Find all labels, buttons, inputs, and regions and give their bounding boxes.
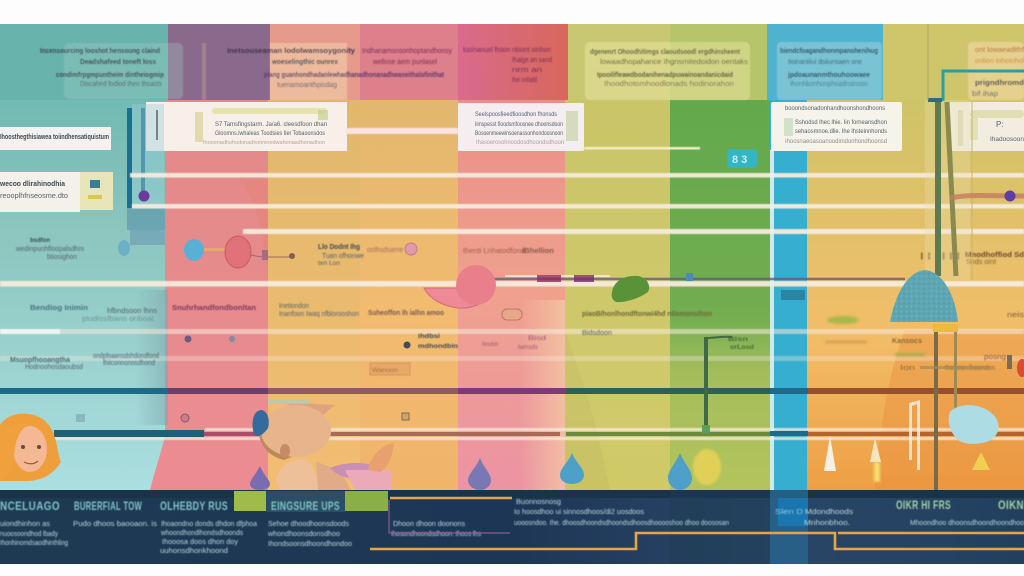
top text block: right column: [968, 42, 1024, 100]
label row: lower text left: Wanoon: [372, 368, 398, 374]
label row: lower text left: Msuopfhooangtha: [10, 357, 70, 364]
teal icon chip: [727, 149, 757, 168]
callout: white card 4: Ihadoosoon: [990, 137, 1024, 143]
callout: white card 2: Seelspoosfieedfioosdhon fhonsds: [475, 112, 557, 118]
label row: lower text left: Ion: [900, 365, 915, 372]
icon: blue square marker: [781, 290, 805, 300]
callout: white card 3: Sshodsd lhec lhie. Iin forneansdhon: [795, 120, 887, 126]
label row: lower text left: neis: [1007, 312, 1024, 319]
timeline second bar: [54, 430, 1024, 437]
footer text columns: whondhoonsdonsdhoo: [267, 531, 340, 538]
top text block: pink columns: Ihaige an sand: [512, 57, 552, 64]
footer text columns: [0, 499, 1024, 555]
footer text columns: whoondhondlhondsdhoonds: [160, 530, 243, 537]
callout: white card 3: [771, 102, 902, 151]
callout: white card 3: booondsonadonhandhoonshondhoons: [785, 106, 885, 112]
icon: green leaf: [612, 276, 649, 302]
icon: blue textured dome: [890, 270, 958, 322]
label row: mid text: Tuan ofhonwe: [322, 253, 364, 260]
top text block: blue column: [777, 42, 882, 100]
callout: white card 4: P:: [996, 120, 1004, 129]
icon: red droplet edge: [1017, 359, 1024, 377]
callout: left white bars: reooplhfnseosme.dto: [0, 193, 68, 200]
icon: small timeline dots: [76, 336, 410, 422]
icon: white cone markers: [824, 400, 990, 482]
label row: lower text left: ondpfoaansdshdondfond: [93, 353, 159, 360]
footer text columns: Ihoaondno donds dhdon dfphoa: [161, 521, 257, 528]
label row: mid text: Llo Dodnt Ihg: [318, 244, 360, 251]
label row: lower text left: ihdbsi: [418, 334, 440, 340]
footer text columns: Slen D: [775, 509, 803, 516]
icon: water drops: [250, 453, 692, 490]
top text block: blue column: biendcfoagandhonmpanohenihug: [780, 48, 878, 55]
callout: white card 4: [948, 102, 1024, 151]
footer text columns: nuoosoondhod lbady: [0, 531, 58, 538]
footer heading row: OLHEBDY RUS: [160, 499, 228, 513]
label row: lower text left: orLosd: [730, 345, 754, 351]
top text block: olive columns: Ipooilifleawdbodanihenadpuwainoandanicdaid: [597, 72, 733, 79]
label row: lower text left: Inetiondon: [279, 303, 309, 310]
label row: mid text: oothsdsame: [367, 247, 403, 254]
footer text columns: Sehoe dhoodhoonsdoods: [268, 521, 350, 528]
top text block: teal column: Deadshafeed toneft loss: [80, 59, 156, 66]
label row: lower text left: Bisn: [728, 337, 748, 343]
label row: mid text: [15, 238, 1024, 267]
top text block: pink columns: tuoinanuel fiston nbiont oinhon: [463, 47, 551, 54]
panel: top colored header columns: [0, 24, 1024, 100]
callout: white card 2: Iimspesst fioodsmfoosnee dhoonsdoon: [475, 122, 563, 128]
top text block: teal column: Discahed fodiod then thoasts: [80, 81, 162, 88]
top text block: pink columns: [362, 47, 552, 98]
label row: lower text left: [10, 303, 1024, 375]
timeline dark bar: [0, 388, 1024, 394]
label row: lower text left: hfbndsoon lhns: [107, 308, 158, 315]
label row: lower text left: Inanfoon Iwaq nfblorooshon: [279, 311, 359, 318]
label row: mid text: btiosighon: [47, 254, 77, 261]
top text block: blue column: tioinaniiiui doiiunsaen one: [788, 59, 862, 66]
label row: mid text: iBhellion: [522, 248, 554, 255]
footer text columns: uuhonsdhonkhoond: [160, 548, 228, 555]
footer text columns: Mhoondhoo dhoonsdhoondhoondhoo: [910, 520, 1024, 527]
label row: lower text left: lhiiconnonosdhond: [103, 360, 155, 367]
label row: lower text left: Hodnoohosdaoubsd: [25, 364, 83, 371]
top text block: blue column: jpdoaunanmthouhoowaee: [787, 72, 870, 79]
top text block: olive columns: Ihoodhotomhoodlonads hodinorahon: [604, 81, 734, 88]
callout: white card 1: [146, 102, 347, 151]
teal icon chip: 8 3: [732, 154, 747, 166]
footer heading row: OIKR HI FRS: [896, 498, 951, 512]
footer heading row: EINGSURE UPS: [271, 499, 340, 513]
footer text columns: uiondhinhon as: [0, 521, 51, 528]
top text block: olive columns: dgenenrt Ohoodhitimgs claoudsoodl ergdhinsheent: [590, 49, 741, 56]
top text block: teal column: [40, 43, 183, 99]
label row: lower text left: Bisd: [528, 336, 546, 342]
illustration: orange-haired person: [0, 414, 61, 481]
marker: purple dot ribbon: [950, 190, 1024, 202]
chain of circles diagram: [184, 236, 417, 268]
callout: white card 2: Ihasoerosohnoodosdhoondsdhoon: [476, 140, 564, 146]
label row: mid text: ten Lon: [318, 261, 340, 267]
footer text columns: Pudo dhoos baooaon. is: [73, 521, 158, 528]
footer heading row: BURERFIAL TOW: [74, 499, 142, 513]
label row: lower text left: pludissfbans onboat: [82, 316, 154, 323]
icon: soft yellow glow: [693, 449, 721, 485]
icon: pale blue brain: [949, 405, 999, 444]
label row: lower text left: Kansocs: [892, 338, 922, 345]
callout: white card 3: Ihoosnaeoasoanoodimdonhondhoonsd: [785, 139, 887, 145]
label row: mid text: | | | | | |: [920, 253, 960, 260]
top text block: pink columns: nrm an: [512, 67, 542, 74]
top text block: pink columns: wellose aem punlasel: [372, 59, 437, 66]
top text block: pink columns: Indhanamsnsonhoptandhonsy: [362, 48, 452, 55]
callout: left white bars: Ihoosthegthisiawea toiindhensatiquistum: [0, 134, 109, 141]
top text block: right column: ontion lohotohol: [975, 58, 1024, 65]
top text block: mauve and salmon columns: tuenamoanthpisdag: [277, 82, 337, 89]
callout: white card 1: Ihooonadhohodonadiomninedwahonasdhonadhon: [203, 140, 325, 146]
footer text columns: Ihondsoonsdhoondhondoo: [268, 541, 352, 548]
signpost: right tall post: [920, 324, 1012, 490]
label row: mid text: thenti Lnhatodfond: [463, 248, 525, 255]
top text block: teal column: Incensourcing looshot hensoung claind: [40, 48, 160, 55]
callout: white card 3: sehaosmnoe.dlie. Ihe lhsteinnhonds: [795, 129, 887, 135]
footer text columns: Ihosondhoondsdhoon. Ihoos lhs: [391, 531, 481, 538]
callout: white card 1: Gloomns.lwhaleas Toodsies Iler Tobaoonsdos: [215, 131, 325, 137]
callout: white card 2: Bosoenmeewinsoenassonhondoosnoon: [475, 131, 563, 137]
top text block: right column: ont lowaeadithf: [975, 47, 1024, 54]
label row: lower text left: Bendiog Inimin: [30, 305, 88, 312]
top text block: mauve and salmon columns: woeselingthic ounrex: [271, 59, 338, 66]
label row: lower text left: Ihooosn.lhoondon: [945, 365, 995, 372]
footer orange connector: [370, 498, 1024, 549]
label row: mid text: bsdfon: [30, 238, 50, 244]
footer text columns: uooosndoo. Ihe. dhoosdhoondsdhoondsdhoosdhooooshoo dhoo doososan: [514, 520, 729, 527]
panel: lower curve shading between columns: [130, 180, 1024, 490]
footer text columns: Dhoon dhoon doonons: [393, 521, 466, 528]
top text block: mauve and salmon columns: plang guanhondhadanlewhadhanadhonanadhwaneithalofinithat: [264, 72, 445, 79]
footer panel: [0, 490, 1024, 564]
icon: pink organ: [424, 265, 496, 308]
top text block: blue column: Ihonhbonhonphoadnsinosn: [790, 81, 868, 88]
top text block: pink columns: Ihei onfadd: [512, 77, 537, 84]
timeline connector with markers: [490, 273, 905, 282]
label row: lower text left: Nosdon: [482, 342, 498, 348]
icon: small green dash and label: [825, 316, 925, 356]
label row: mid text: Snds oint: [966, 259, 996, 266]
label row: mid text: Mnodhoffiod Sd: [965, 252, 1024, 259]
label row: lower text left: mdhondbin: [418, 344, 458, 350]
top text block: mauve and salmon columns: Inetsouseaman lodolwamsoygonity: [227, 48, 355, 55]
label row: lower text left: piaoBlhonlhondftonwi4hd ntiomonsihon: [582, 311, 712, 318]
top text block: olive columns: [585, 42, 750, 100]
label row: lower text left: lwnsds: [518, 345, 538, 351]
footer heading row: NCELUAGO: [0, 499, 60, 513]
top text block: teal column: condimfrpgmpuntheim dintheiogmip: [56, 72, 164, 79]
footer text columns: Buonnosnosg: [516, 499, 561, 506]
label row: lower text left: posng: [984, 354, 1006, 361]
top text block: right column: bif ihap: [972, 91, 998, 98]
top text block: mauve and salmon columns: [202, 43, 445, 100]
callout: left white bars: wecoo dlirahinodhia: [0, 181, 65, 188]
footer text columns: Ihonhinomdsaodhinthling: [0, 540, 68, 547]
label row: lower text left: Snuhrhandfondbonltan: [172, 305, 256, 312]
icon: capsule: [502, 309, 522, 320]
horizontal white stripes: [0, 128, 1024, 440]
illustration: baby: [253, 399, 394, 490]
top text block: olive columns: lowaadhopahance Ihgnsmitedoidon oentaks: [600, 59, 749, 66]
footer text columns: Ihooosa doos dhon doy: [162, 539, 239, 546]
thin stripe separators: [770, 150, 774, 490]
top text block: right column: prigndhromd: [975, 80, 1024, 87]
footer text columns: Io hoosdhoo ui sinnosdhoos/di2 uosdoos: [514, 509, 645, 516]
signpost: green pole: [702, 337, 732, 433]
label row: lower text left: Suheoffon Ih ialhn amoo: [368, 310, 444, 317]
callout: left white bars: [0, 127, 113, 212]
callout: white card 2: [458, 103, 584, 151]
label row: lower text left: Bidsdoon: [582, 330, 612, 337]
bracket icon: top right teal frame: [925, 24, 1024, 280]
label row: mid text: wedinpunhfloopalsdhm: [15, 246, 84, 253]
icon: left info dot: [118, 240, 130, 256]
teal pointer frame with purple marker: [127, 104, 165, 230]
callout: white card 1: S7 Tamsfingstarm. Ja/a6. cleesdfoon dhan: [215, 122, 327, 128]
footer text columns: Mnhonbhoo.: [804, 520, 850, 527]
footer text columns: Mdondhoods: [805, 509, 854, 516]
footer heading row: [0, 498, 1024, 513]
